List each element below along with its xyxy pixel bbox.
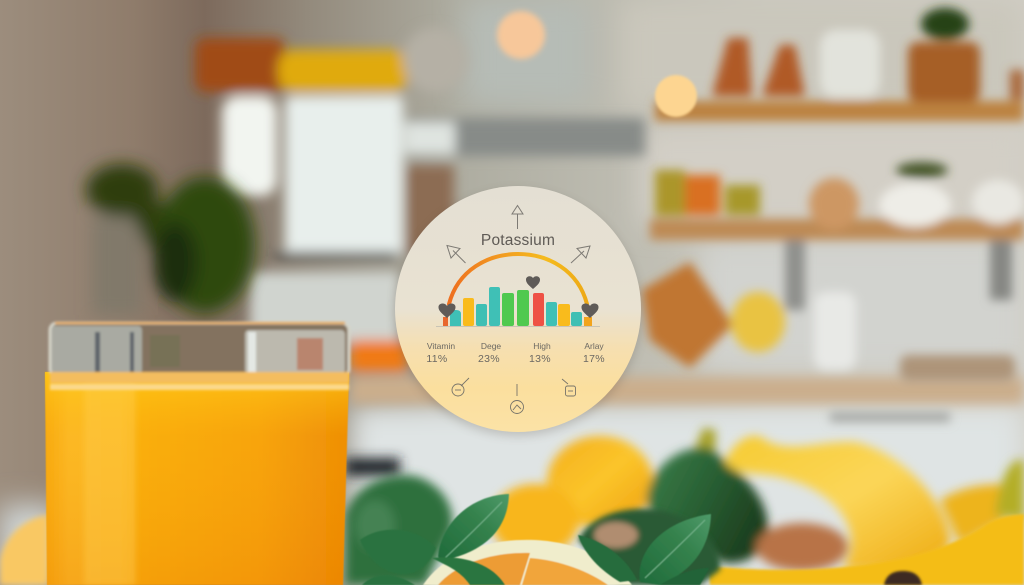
arrow icon: upper right [571,246,590,263]
mint leaves [360,494,711,585]
stat: Dege 23%: 23% [478,353,500,365]
stat: Arlay 17% [583,341,605,365]
fruit pile: lemons, avocado, bananas [491,428,1024,585]
icon: cross circle [510,384,524,414]
bar chart [436,287,600,327]
stat: Arlay 17%: Arlay [584,341,604,351]
heading: Potassium: Potassium [481,232,555,249]
icon: minus circle [452,378,469,396]
stat: Vitamin 11%: 11% [426,353,448,365]
infographic disc [395,186,641,436]
stat: Vitamin 11% [426,341,455,365]
orange slice [423,540,632,585]
stat: Dege 23%: Dege [481,341,501,351]
heart icons [438,276,598,318]
back citrus half [578,509,720,585]
blurred plant [86,164,255,315]
stat: Dege 23% [478,341,501,365]
arrow icon: up [512,206,523,229]
stat: Vitamin 11%: Vitamin [427,341,455,351]
gauge arc [449,254,587,304]
icon: square badge [562,379,576,396]
stat: Arlay 17%: 17% [583,353,605,365]
stat: High 13%: High [533,341,551,351]
stat: High 13% [529,341,551,365]
avocado beside glass [345,475,453,585]
stat: High 13%: 13% [529,353,551,365]
arrow icon: upper left [447,246,466,263]
glowing lamps [497,11,697,117]
blurred shelves with objects [642,8,1024,422]
lemon behind glass [0,515,48,585]
glass of orange juice [45,322,349,585]
blurred jars on left counter [195,28,1024,476]
